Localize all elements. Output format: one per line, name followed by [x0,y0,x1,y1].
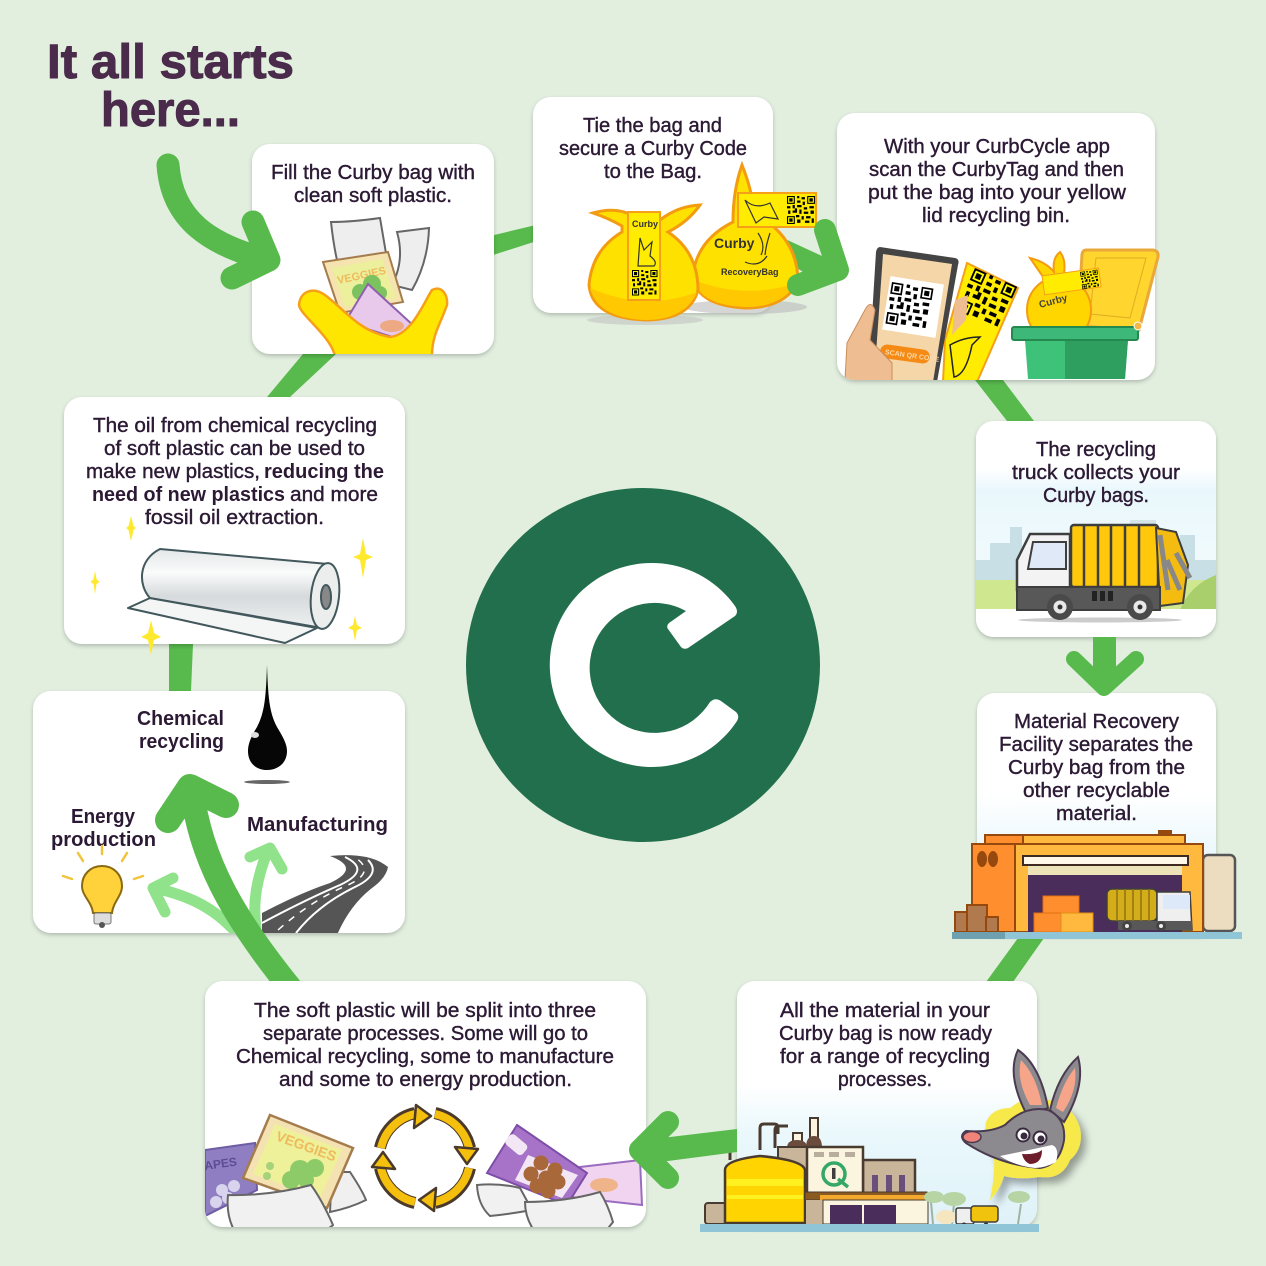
step 2 text: secure a Curby Code [559,138,747,160]
arrow: main route to chemical recycling [168,787,292,990]
step 5 text: Material Recovery [1014,711,1179,733]
illustration: two tied Curby bags: Curby [632,219,658,229]
step 5 text: other recyclable [1023,780,1170,802]
illustration: soft plastic packs [203,1115,642,1232]
title: here... [101,84,240,137]
illustration: two tied Curby bags [587,165,816,325]
step 7 text: Chemical recycling, some to manufacture [236,1046,614,1068]
panel: step 7 three processes [203,981,646,1232]
label: energy production: production [51,829,156,851]
illustration: phone, tag and bin [845,247,1158,382]
step 3 text: put the bag into your yellow [868,182,1127,204]
illustration: road [262,855,388,935]
illustration: phone, tag and bin: Curby [1038,293,1069,311]
illustration: recycling plant [700,1118,1039,1232]
step 3 text [868,136,1127,227]
step 1 text: Fill the Curby bag with [271,162,475,184]
step 5 text: Facility separates the [999,734,1193,756]
step 7 text: and some to energy production. [279,1069,572,1091]
label: energy production: Energy [71,806,136,828]
arrow: to energy production [153,878,232,928]
step 8 text: need of new plastics [92,484,285,506]
icon: oil drop [244,665,290,784]
panel: step 6 ready for recycling [700,981,1081,1232]
panel: recycling outcomes [33,665,405,935]
illustration: soft plastic packs: APES [203,1155,238,1173]
illustration: plastic roll [128,549,342,643]
step 8 text: and more [290,484,378,506]
step 3 text: lid recycling bin. [922,205,1070,227]
title [47,36,294,137]
illustration: two tied Curby bags: Curby [714,235,755,251]
panel: step 2 tie the bag [533,97,816,325]
step 8 text: reducing the [264,461,384,483]
step 5 text: Curby bag from the [1008,757,1185,779]
icon: light bulb [63,846,143,928]
illustration: bag with soft plastics: VEGGIES [336,265,387,287]
illustration: truck scene [976,421,1216,637]
step 2 text: Tie the bag and [583,115,722,137]
arrow: truck to facility [1074,637,1136,688]
step 2 text: to the Bag. [604,161,702,183]
panel: step 8 oil and new plastics [64,397,405,655]
step 4 text: The recycling [1036,439,1156,461]
step 6 text: All the material in your [780,1000,990,1022]
step 5 text [999,711,1193,825]
step 6 text [779,1000,992,1091]
central logo [466,488,820,842]
illustration: facility building [952,830,1242,939]
step 6 text: for a range of recycling [780,1046,990,1068]
step 5 text: material. [1056,803,1137,825]
arrow: plant to three processes [640,1122,737,1178]
step 7 text: separate processes. Some will go to [263,1023,588,1045]
arrow: start [168,165,269,278]
label: chemical recycling [137,708,224,753]
illustration: bag with soft plastics [299,218,447,356]
step 4 text [1012,439,1180,507]
panel: step 3 scan the tag [837,113,1158,382]
step 8 text: make new plastics, [86,461,260,483]
label: chemical recycling: recycling [139,731,224,753]
step 1 text: clean soft plastic. [294,185,452,207]
illustration: two tied Curby bags: RecoveryBag [721,267,779,277]
step 4 text: Curby bags. [1043,485,1149,507]
icon: recycling loop arrows [372,1105,478,1211]
step 4 text: truck collects your [1012,462,1180,484]
step 8 text: The oil from chemical recycling [93,415,377,437]
label: chemical recycling: Chemical [137,708,224,730]
label: energy production [51,806,156,851]
step 3 text: With your CurbCycle app [884,136,1110,158]
illustration: phone, tag and bin: SCAN QR CODE [884,349,940,364]
panel: step 5 material recovery facility [952,693,1242,939]
icon: sparkles [90,516,373,655]
title: It all starts [47,36,294,89]
step 2 text [559,115,747,183]
step 8 text [86,415,384,529]
step 8 text: fossil oil extraction. [145,507,324,529]
step 8 text: of soft plastic can be used to [104,438,365,460]
panel: step 4 recycling truck [976,421,1216,637]
step 6 text: Curby bag is now ready [779,1023,992,1045]
step 3 text: scan the CurbyTag and then [869,159,1124,181]
arrow head: to scan step [798,230,838,285]
step 6 text: processes. [838,1069,932,1091]
step 7 text: The soft plastic will be split into three [254,1000,596,1022]
step 7 text [236,1000,614,1091]
step 1 text [271,162,475,207]
panel: step 1 fill the bag [252,144,494,356]
arrow: to manufacturing [250,848,282,928]
label: manufacturing: Manufacturing [247,814,388,836]
connector arrows behind the cards [169,224,1044,982]
illustration: soft plastic packs: VEGGIES [274,1128,339,1164]
illustration: Curby mascot [962,1050,1081,1200]
